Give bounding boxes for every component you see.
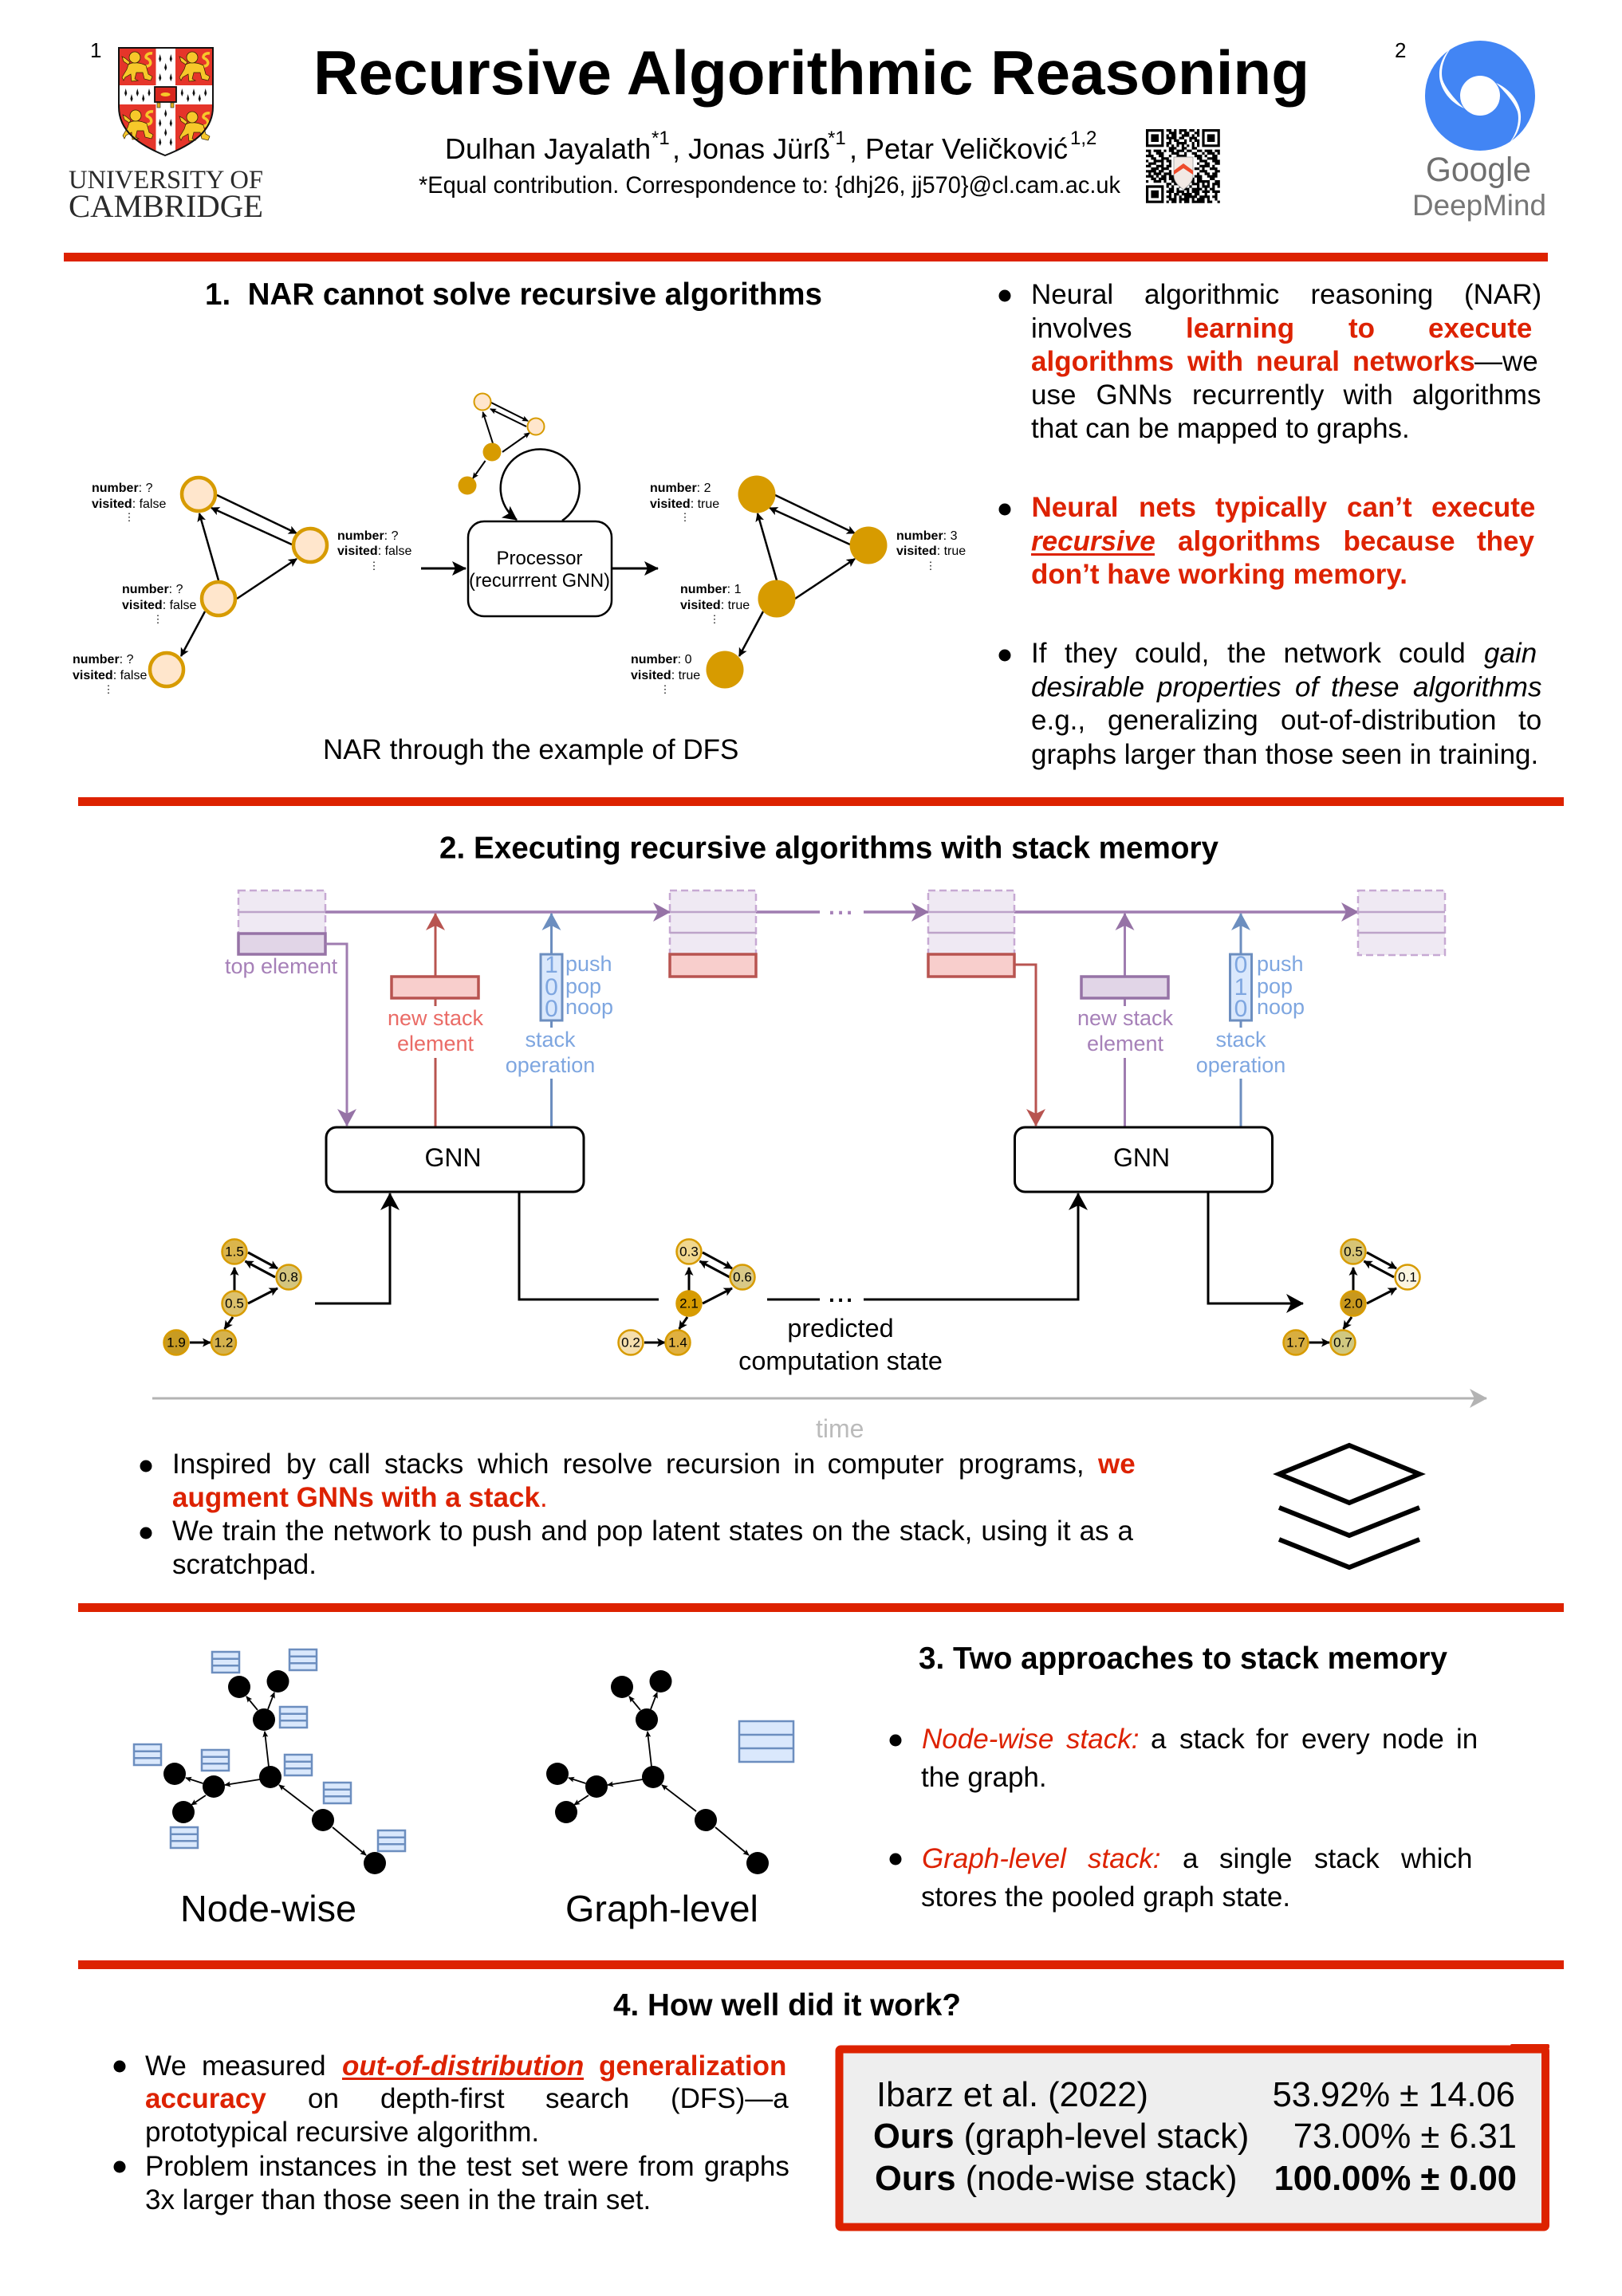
black ellipsis: ... (827, 1274, 854, 1309)
label: predicted computation state: predicted (787, 1314, 894, 1343)
bullet 1: algorithms (1031, 346, 1174, 377)
bullet 1: accuracy (145, 2083, 266, 2114)
arrow: stack operation 1: push (565, 952, 612, 976)
bullet: graph-level: Graph-level (922, 1843, 1067, 1874)
panel: section 1 (73, 277, 1541, 770)
bullet 2: execute (1431, 492, 1535, 523)
bullet 1: Inspired (172, 1449, 272, 1480)
logo: Google DeepMind (1412, 41, 1546, 222)
header (69, 37, 1546, 224)
bullet 3: these (1331, 671, 1400, 703)
bullet: node-wise: for (1256, 1724, 1289, 1755)
bullet: graph-level: stores the pooled graph state. (921, 1881, 1290, 1913)
row: graph-level stack (873, 2117, 1517, 2156)
logo text: Google (1426, 151, 1531, 189)
label: time: time (816, 1414, 864, 1443)
arrow: new stack element 2: element (1087, 1032, 1164, 1056)
small graph 3 (1284, 1239, 1419, 1355)
bullet 2: because (1343, 526, 1455, 556)
labels: input node features: ⋮ (124, 511, 134, 523)
bullet 3: out-of-distribution (1281, 705, 1496, 736)
small graph 1: 1.9 (167, 1335, 186, 1350)
arrow: new stack element 1 (388, 914, 484, 1127)
heading: section 3: 3. Two approaches to stack memory (919, 1641, 1448, 1676)
arrow: new stack element 2: new stack (1077, 1006, 1174, 1030)
authors: *1 (652, 128, 670, 149)
GNN box 1: GNN (424, 1143, 482, 1172)
arrow: input to processor (421, 568, 466, 569)
labels: input node features: number: ? (92, 482, 153, 495)
labels: input node features: visited: false (92, 497, 166, 511)
labels: input node features: number: ? (73, 653, 134, 666)
row: graph-level stack: Ours (graph-level stack) (873, 2117, 1249, 2156)
arrow: stack operation 1: 1 (545, 952, 558, 978)
bullet 3: could (1399, 638, 1466, 669)
arrow: stack operation 2: 0 (1234, 952, 1247, 978)
bullet 1: execute (1428, 313, 1532, 344)
arrow: stack operation 1: pop (565, 974, 601, 998)
bullet 1: to (1348, 313, 1375, 344)
logo text: UNIVERSITY OF (69, 166, 263, 195)
title: Recursive Algorithmic Reasoning (313, 37, 1309, 108)
graph: small example above processor (458, 394, 544, 494)
panel: section 3 (134, 1641, 1478, 1929)
arrow: time axis (152, 1397, 1486, 1400)
stack lines and arrows (325, 910, 1358, 914)
affiliation marker 2: 2 (1395, 38, 1406, 62)
bullet 3: network (1284, 638, 1382, 669)
bullet 3: algorithms (1413, 671, 1541, 703)
arrow: stack operation 2: operation (1196, 1053, 1285, 1077)
logo: University of Cambridge (69, 46, 263, 224)
bullet 3: properties (1156, 671, 1281, 703)
label: top element: top element (225, 954, 338, 978)
row: Ibarz et al.: 53.92% ± 14.06 (1273, 2076, 1515, 2114)
bullet 1 (140, 1449, 1136, 1513)
panel: section 4 (113, 1988, 1549, 2227)
diagram: NAR through DFS (73, 394, 966, 765)
bullet: node-wise: stack (1179, 1724, 1245, 1755)
bullet 1: GNNs (1096, 379, 1172, 411)
small graph 3: 1.7 (1286, 1335, 1305, 1350)
labels: input node features: ⋮ (104, 683, 113, 695)
shared stack (739, 1721, 793, 1762)
bullet 1: which (477, 1449, 549, 1480)
labels: input node features (73, 482, 411, 695)
arrow: stack operation 2: 1 (1234, 974, 1247, 1001)
bullet 3: to (1518, 705, 1541, 736)
arrow: new stack element 1: element (397, 1032, 474, 1056)
section divider 2-3 (78, 1603, 1564, 1612)
bullet: node-wise: node (1382, 1724, 1444, 1755)
small graph 2: 0.2 (621, 1335, 640, 1350)
black flow arrows (315, 1192, 1303, 1303)
small graph 1: 0.8 (279, 1269, 298, 1285)
bullet 1: (NAR) (1464, 279, 1541, 310)
heading: section 1: 1. NAR cannot solve recursive algorithms (205, 277, 822, 312)
labels: input node features: ⋮ (368, 560, 380, 572)
bullet 2: typically (1215, 492, 1328, 523)
bullet 2: Neural (1032, 492, 1118, 523)
bullet: node-wise (890, 1724, 1478, 1793)
labels: output node features: number: 1 (680, 583, 742, 596)
bullet 3: generalizing (1108, 705, 1258, 736)
bullet 3 (998, 638, 1541, 770)
small graph 3: 2.0 (1344, 1296, 1363, 1311)
bullet 2 (140, 1516, 1134, 1580)
graph: output nodes (707, 475, 887, 689)
arrow: new stack element 2 (1077, 914, 1174, 1127)
small graph 2: 2.1 (679, 1296, 699, 1311)
bullet 1: measured (202, 2050, 326, 2082)
QR code (1146, 131, 1220, 202)
arrow: stack operation 2: pop (1257, 974, 1293, 998)
bullet 2: We train the network to push and pop latent states on the stack, using it as a (172, 1516, 1134, 1547)
panel: section 2 (140, 831, 1486, 1580)
label: predicted computation state: computation state (738, 1347, 943, 1375)
authors: , Petar Veličković (849, 132, 1068, 165)
small graph 2: 0.6 (733, 1269, 752, 1285)
row: graph-level stack: 73.00% ± 6.31 (1293, 2117, 1517, 2156)
bullet 2: 3x larger than those seen in the train set. (145, 2184, 651, 2215)
icon: Cambridge shield (117, 46, 215, 158)
bullet: graph-level: stack: (1088, 1843, 1160, 1874)
correspondence note: *Equal contribution. Correspondence to: {dhj26, jj570}@cl.cam.ac.uk (419, 172, 1121, 199)
arrow: stack operation 1: 0 (545, 974, 558, 1001)
GNN box 2 (1014, 1127, 1273, 1192)
bullet 3: desirable (1031, 671, 1144, 703)
bullet 2: recursive (1031, 526, 1155, 556)
labels: output node features: visited: true (650, 497, 719, 511)
bullet 1 (113, 2050, 789, 2148)
bullet 1: recurrently (1192, 379, 1325, 411)
bullet 1: augment GNNs with a stack. (172, 1482, 548, 1513)
bullet 1: (DFS)—a (671, 2083, 789, 2114)
bullet: node-wise: a (1151, 1724, 1167, 1755)
bullet 1: programs, (959, 1449, 1085, 1480)
arrow: top element to GNN 2 (1014, 965, 1036, 1126)
bullet 1: generalization (599, 2050, 786, 2082)
bullet: node-wise: in (1456, 1724, 1478, 1755)
bullet 2 (998, 492, 1535, 590)
bullet 1: use (1031, 379, 1076, 411)
text block: section 3 bullets (890, 1724, 1478, 1913)
row: node-wise stack (875, 2160, 1517, 2198)
bullet: node-wise: stack: (1066, 1724, 1139, 1755)
bullet 1: with (1343, 379, 1393, 411)
graph: node-wise (163, 1670, 386, 1874)
row: node-wise stack: Ours (node-wise stack) (875, 2160, 1237, 2198)
table frame (839, 2044, 1549, 2227)
bullet 2: scratchpad. (172, 1549, 317, 1580)
section divider 3-4 (78, 1960, 1564, 1969)
bullet 2: Problem instances in the test set were from graphs (145, 2151, 789, 2182)
bullet 3: they (1065, 638, 1118, 669)
graph: graph-level (546, 1670, 769, 1874)
bullet 1: by (286, 1449, 316, 1480)
processor box: (recurrrent GNN) (469, 570, 610, 592)
labels: output node features: ⋮ (660, 683, 670, 695)
GNN box 2: GNN (1113, 1143, 1170, 1172)
label: predicted computation state (738, 1314, 943, 1375)
icon: swirl (1425, 41, 1535, 151)
labels: output node features: number: 2 (650, 482, 711, 495)
bullet 1: algorithmic (1144, 279, 1279, 310)
per-node stacks (134, 1649, 405, 1851)
labels: input node features: visited: false (337, 545, 411, 558)
text block: section 4 bullets (113, 2050, 789, 2215)
bullet 1: stacks (384, 1449, 463, 1480)
bullet 3: graphs larger than those seen in training. (1031, 739, 1538, 770)
bullet 1: Neural (1031, 279, 1113, 310)
bullet 1: that can be mapped to graphs. (1031, 413, 1410, 444)
bullet: graph-level: a (1183, 1843, 1199, 1874)
labels: input node features: number: ? (122, 583, 183, 596)
header divider (64, 253, 1548, 261)
bullet 2: don’t have working memory. (1031, 559, 1407, 590)
logo: Google DeepMind: DeepMind (1412, 189, 1546, 222)
processor box (468, 521, 612, 616)
bullet 1: learning (1186, 313, 1294, 344)
stack 1 (238, 890, 325, 954)
label: graph-level: Graph-level (565, 1888, 758, 1929)
bullet 1: recursion (666, 1449, 781, 1480)
small graph 2 (619, 1239, 754, 1355)
bullet 2: nets (1139, 492, 1196, 523)
labels: output node features: number: 0 (631, 653, 692, 666)
bullet 3: e.g., (1031, 705, 1085, 736)
bullet 1: algorithms (1412, 379, 1541, 411)
bullet 1: with (1187, 346, 1243, 377)
graph: input nodes (150, 478, 327, 686)
bullet 3: could, (1135, 638, 1209, 669)
small graph 3: 0.1 (1398, 1269, 1417, 1285)
small graph 1: 0.5 (225, 1296, 244, 1311)
bullet 1: resolve (563, 1449, 652, 1480)
small graph 2: 0.3 (679, 1244, 699, 1260)
labels: output node features: visited: true (631, 669, 700, 682)
diagram: stack timeline (152, 887, 1486, 1443)
small graph 1: 1.2 (215, 1335, 233, 1350)
bullet: node-wise: Node-wise (922, 1724, 1053, 1755)
stack 3 (928, 890, 1014, 977)
bullet 1: neural (1256, 346, 1340, 377)
row: Ibarz et al.: Ibarz et al. (2022) (876, 2076, 1148, 2114)
labels: output node features: visited: true (896, 545, 966, 558)
bullet 2: can’t (1347, 492, 1412, 523)
bullet: graph-level: stack (1314, 1843, 1380, 1874)
processor loop arrow (501, 449, 580, 521)
bullet: node-wise: the graph. (921, 1762, 1047, 1793)
labels: input node features: ⋮ (153, 613, 163, 625)
bullet 1: depth-first (380, 2083, 505, 2114)
arrow: stack operation 2: 0 (1234, 996, 1247, 1022)
arrow: stack operation 2: stack (1215, 1028, 1266, 1052)
bullet: graph-level: which (1400, 1843, 1472, 1874)
bullet 1: prototypical recursive algorithm. (145, 2117, 539, 2148)
bullet 2: algorithms (1178, 526, 1321, 556)
icon: stack layers (1279, 1445, 1419, 1567)
small graph 3: 0.5 (1344, 1244, 1363, 1260)
bullet 1: We (145, 2050, 187, 2082)
GNN box 1 (326, 1127, 584, 1192)
heading: section 2: 2. Executing recursive algorithms with stack memory (439, 831, 1219, 866)
arrow: stack operation 2: push (1257, 952, 1304, 976)
bullet: graph-level (890, 1843, 1472, 1913)
labels: output node features: ⋮ (710, 613, 719, 625)
labels: input node features: number: ? (337, 529, 399, 543)
arrow: stack operation 1: 0 (545, 996, 558, 1022)
small graph 1 (164, 1239, 301, 1355)
arrow: stack operation 1 (506, 914, 613, 1127)
bullet 1: involves (1031, 313, 1132, 344)
bullet 2: they (1477, 526, 1534, 556)
purple ellipsis: ... (827, 887, 854, 922)
bullet 3: If (1031, 638, 1047, 669)
bullet 1: call (329, 1449, 371, 1480)
heading: section 4: 4. How well did it work? (613, 1988, 961, 2023)
bullet 1: computer (828, 1449, 944, 1480)
results table (839, 2044, 1549, 2227)
labels: input node features: visited: false (73, 669, 147, 682)
bullet 1: search (545, 2083, 629, 2114)
bullet 1: —we (1474, 346, 1538, 377)
arrow: top element to GNN (325, 944, 347, 1126)
diagram: node-wise stacks (134, 1649, 405, 1929)
logo: University of Cambridge: CAMBRIDGE (69, 188, 263, 224)
arrow: stack operation 1: stack (525, 1028, 576, 1052)
section divider 1-2 (78, 797, 1564, 806)
affiliation marker 1: 1 (90, 38, 101, 62)
row: node-wise stack: 100.00% ± 0.00 (1274, 2160, 1517, 2198)
bullet 2 (113, 2151, 789, 2215)
labels: output node features: number: 3 (896, 529, 958, 543)
bullet 3: gain (1484, 638, 1537, 669)
bullet: node-wise: every (1301, 1724, 1370, 1755)
stack 4 (1358, 890, 1445, 955)
small graph 1: 1.5 (225, 1244, 244, 1260)
arrow: stack operation 1: operation (506, 1053, 595, 1077)
bullet 1: on (308, 2083, 339, 2114)
arrow: stack operation 1: noop (565, 995, 613, 1019)
diagram caption: NAR through the example of DFS (323, 734, 738, 765)
bullet 1 (998, 279, 1541, 444)
labels: output node features: visited: true (680, 599, 750, 612)
labels: input node features: visited: false (122, 599, 196, 612)
bullet 1: networks (1352, 346, 1475, 377)
row: Ibarz et al. (876, 2076, 1515, 2114)
labels: output node features: ⋮ (679, 511, 691, 523)
processor box: Processor (496, 548, 583, 569)
stack 2 (670, 890, 756, 977)
labels: output node features (631, 482, 966, 695)
authors: 1,2 (1070, 128, 1096, 149)
arrow: new stack element 1: new stack (388, 1006, 484, 1030)
arrow: stack operation 2: noop (1257, 995, 1305, 1019)
text block: section 1 bullets (998, 279, 1541, 770)
bullet: graph-level: single (1219, 1843, 1292, 1874)
authors: , Jonas Jürß (672, 132, 830, 165)
arrow: processor to output (612, 568, 658, 569)
authors: *1 (828, 128, 846, 149)
authors: Dulhan Jayalath (445, 132, 651, 165)
bullet 1: reasoning (1311, 279, 1433, 310)
bullet 3: the (1227, 638, 1266, 669)
diagram: graph-level stack (546, 1670, 793, 1929)
label: node-wise: Node-wise (180, 1888, 356, 1929)
small graph 2: 1.4 (668, 1335, 687, 1350)
small graph 3: 0.7 (1333, 1335, 1352, 1350)
arrow: stack operation 2 (1196, 914, 1305, 1127)
bullet 1: out-of-distribution (342, 2050, 584, 2082)
bullet 1: we (1097, 1449, 1136, 1480)
labels: output node features: ⋮ (925, 560, 936, 572)
bullet 1: in (793, 1449, 815, 1480)
text block: section 2 bullets (140, 1449, 1136, 1580)
bullet 3: of (1295, 671, 1321, 703)
